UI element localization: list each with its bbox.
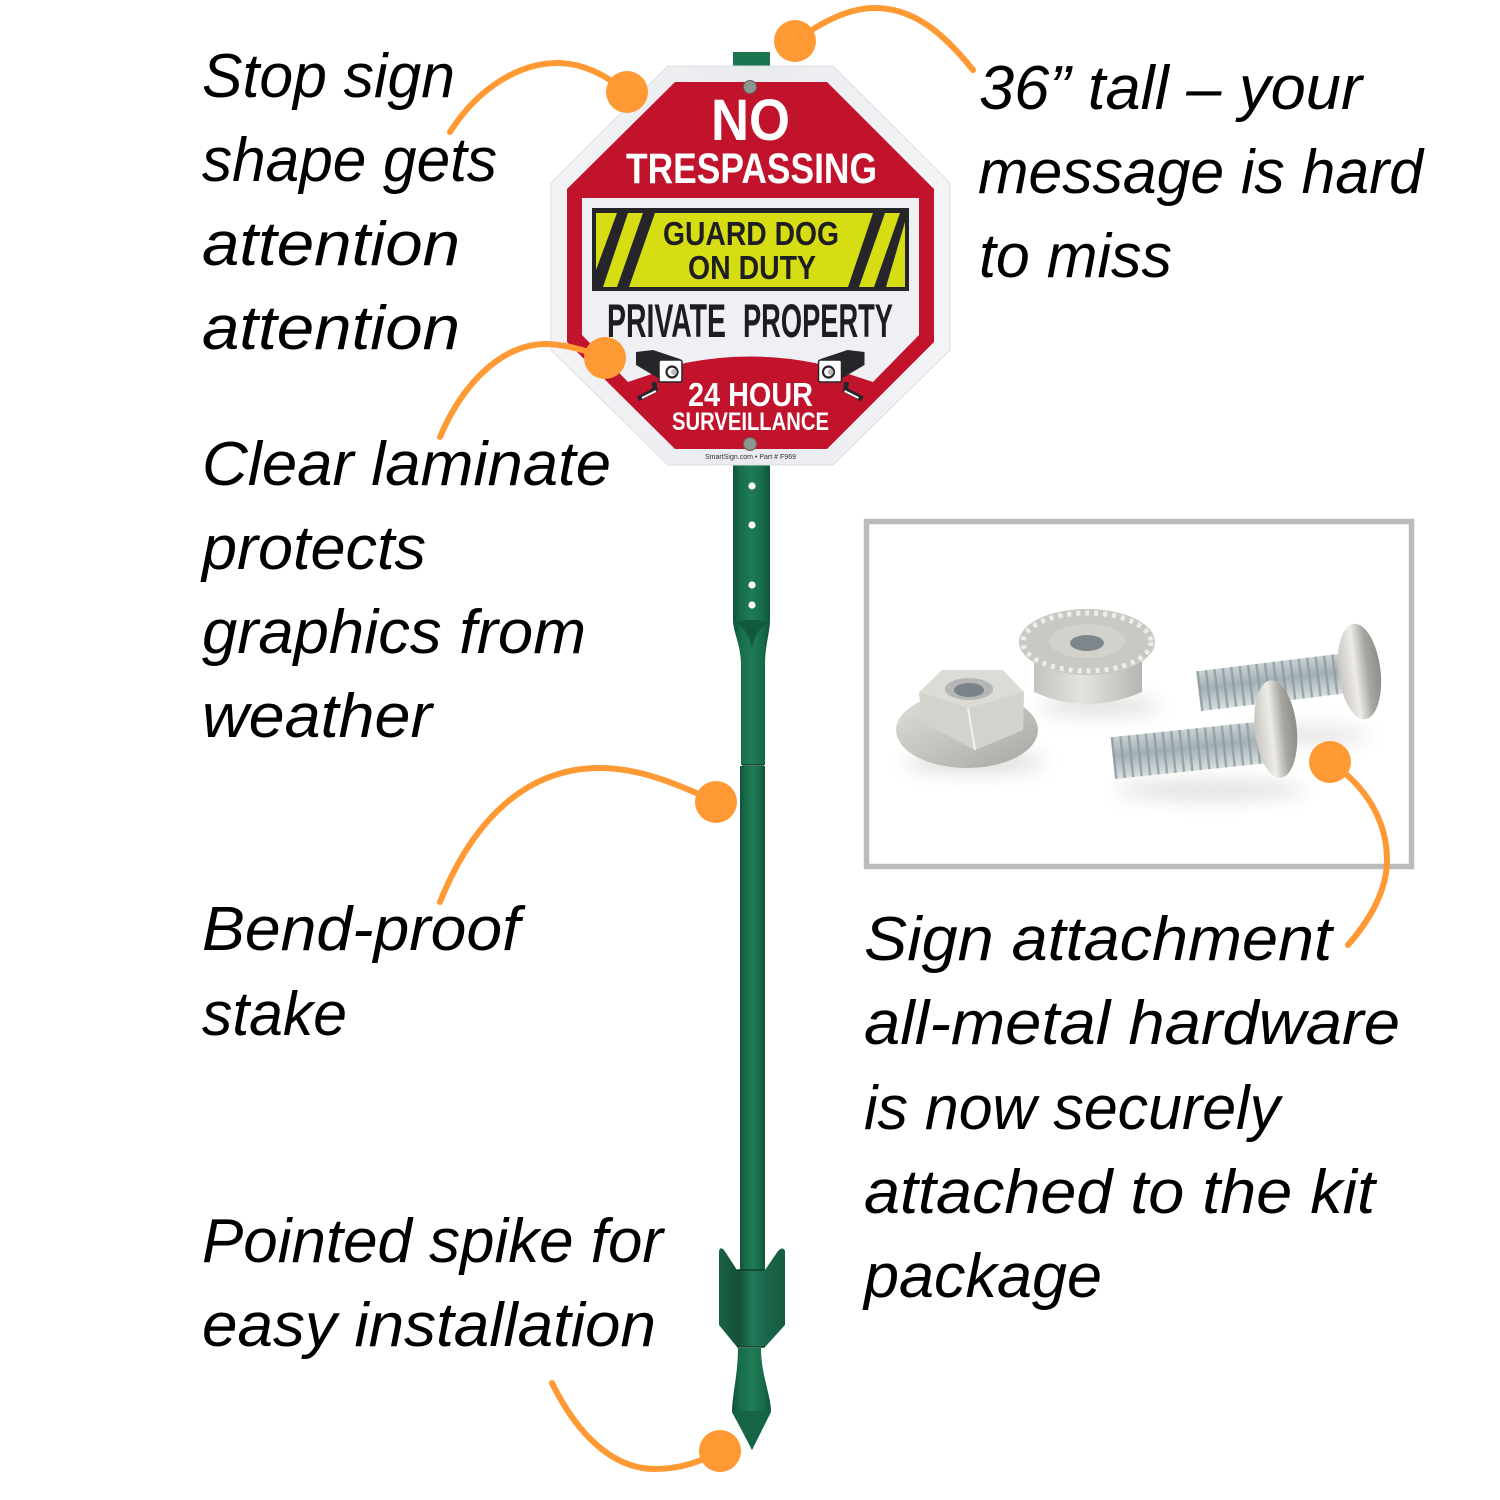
surveillance text: SURVEILLANCE [672,408,829,436]
callout: laminate leader [440,337,626,437]
callout: height leader [774,8,973,70]
heading: NO: NO [711,88,790,153]
text: pointed spike: easy installation [202,1291,656,1360]
stake lower shaft [740,766,765,1276]
text: bend-proof stake: stake [202,980,347,1049]
text: clear laminate: protects [200,514,426,583]
private property text [607,294,893,347]
text: sign attachment hardware: attached to the kit [864,1158,1378,1227]
top screw [744,80,756,94]
photo shadows [905,696,1370,800]
guard dog text: GUARD DOG [663,215,839,252]
callout: stop sign leader [450,63,648,132]
text: pointed spike: Pointed spike for [202,1207,665,1276]
text: sign attachment hardware: is now securely [864,1074,1284,1143]
callout: stake leader [440,768,737,902]
24 hour text: 24 HOUR [688,376,813,413]
panel: hardware photo [866,522,1412,866]
hazard stripes [596,213,905,287]
text: clear laminate: Clear laminate [202,430,611,499]
text: sign attachment hardware: package [862,1242,1102,1311]
ground spike [732,1348,771,1450]
text: sign attachment hardware: all-metal hardware [864,989,1400,1058]
text: 36 inch tall [978,54,1425,291]
stake fins [719,1248,785,1347]
text: clear laminate [200,430,611,751]
text: 36 inch tall: message is hard [978,138,1425,207]
text: 36 inch tall: to miss [979,222,1172,291]
icon: left security camera [636,350,682,399]
text: bend-proof stake: Bend-proof [202,895,526,964]
heading: TRESPASSING: TRESPASSING [626,145,877,193]
stake mounting holes [748,482,756,609]
text: sign attachment hardware [862,905,1400,1311]
private property text: PRIVATE [607,294,726,347]
text: stop sign shape: Stop sign [202,42,455,111]
sign white border [551,66,950,465]
callout: hardware leader [1309,741,1387,945]
text: stop sign shape: shape gets [202,126,497,195]
front bolt [1107,678,1302,795]
back flange nut [1019,609,1155,704]
text: stop sign shape [202,42,497,363]
text: 36 inch tall: 36” tall – your [979,54,1364,123]
text: clear laminate: weather [202,682,434,751]
on duty text: ON DUTY [688,249,816,286]
photo frame [866,522,1412,866]
text: bend-proof stake [202,895,526,1049]
sign red face [567,82,934,449]
private property text: PROPERTY [743,294,893,347]
icon: right security camera [818,350,864,399]
front flange nut [896,670,1038,768]
yellow guard dog band [592,208,909,291]
back bolt [1193,621,1386,739]
octagon sign [551,66,950,465]
callout: spike leader [552,1383,741,1472]
text: stop sign shape: attention [202,210,460,279]
sign white panel [582,198,919,382]
text: pointed spike [202,1207,665,1360]
stake upper flat section [733,460,770,765]
stake with fins and spike [719,52,785,1450]
bottom screw [744,438,756,450]
part number: SmartSign.com • Part # F969 [705,454,796,461]
text: sign attachment hardware: Sign attachment [864,905,1335,974]
text: clear laminate: graphics from [202,598,586,667]
stake top tab [733,52,770,72]
text: stop sign shape: attention [202,294,460,363]
